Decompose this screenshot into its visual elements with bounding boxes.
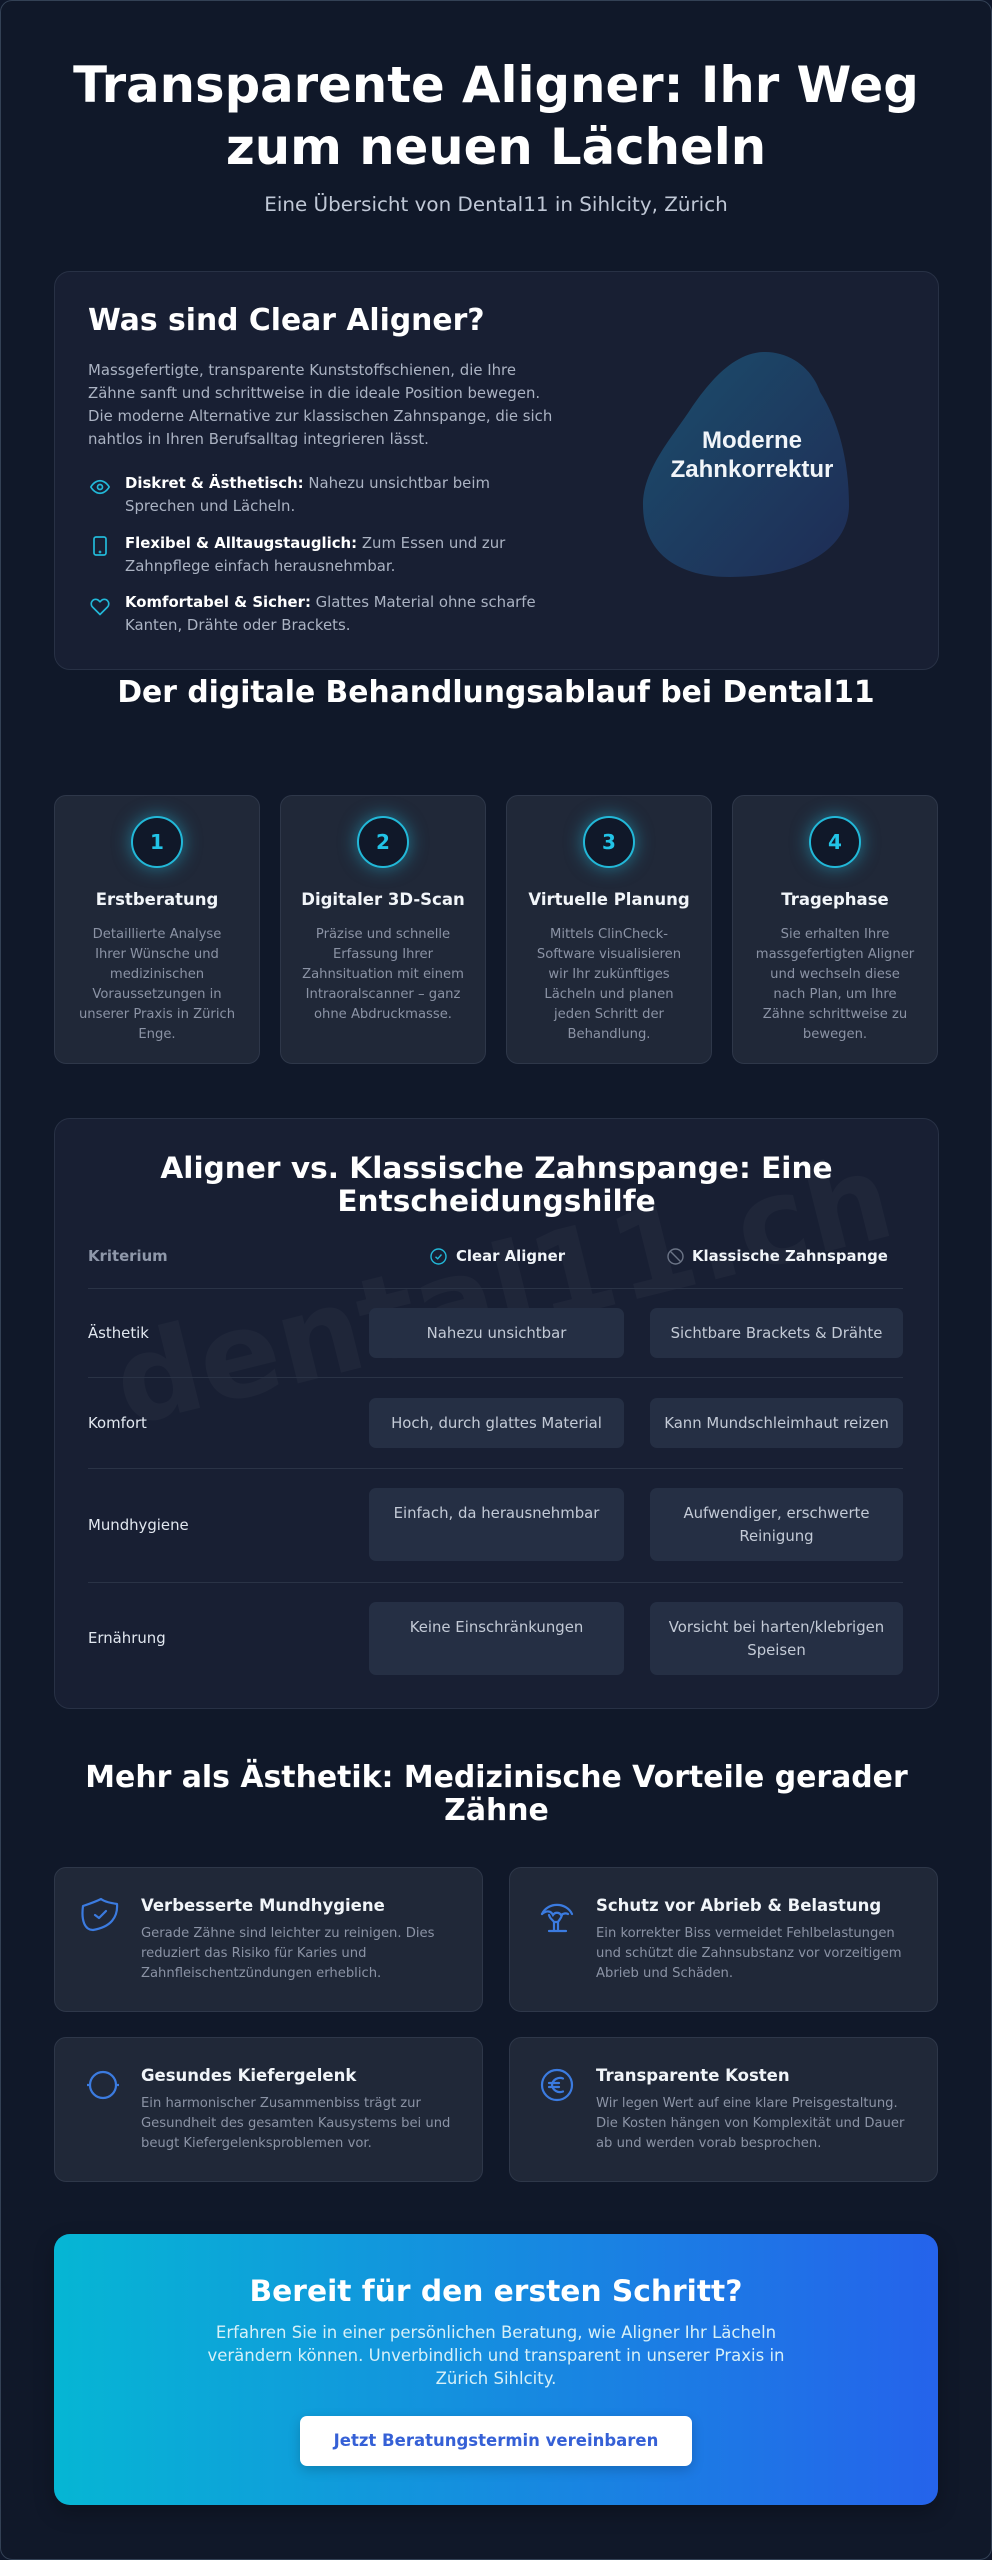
step 1	[54, 795, 260, 1064]
comparison heading: Entscheidungshilfe	[337, 1184, 656, 1218]
cell: aligner ernaehrung: Keine Einschränkungen	[410, 1618, 583, 1636]
row label: komfort: Komfort	[88, 1414, 147, 1432]
cell: klassisch mundhygiene: Reinigung	[739, 1527, 814, 1545]
step description: massgefertigten Aligner	[756, 947, 914, 962]
table header: clear aligner: Clear Aligner	[456, 1247, 565, 1265]
cell: klassisch ernaehrung	[650, 1602, 903, 1675]
cell: aligner komfort: Hoch, durch glattes Material	[391, 1414, 602, 1432]
step description: Intraoralscanner – ganz	[306, 987, 460, 1002]
benefit description: Zahnfleischentzündungen erheblich.	[141, 1966, 381, 1981]
step description: Zahnsituation mit einem	[302, 967, 464, 982]
intro paragraph	[88, 361, 552, 448]
benefit title: Verbesserte Mundhygiene	[141, 1896, 385, 1915]
table header: criterion: Kriterium	[88, 1247, 168, 1265]
panel: comparison	[54, 1118, 939, 1709]
feature text: Flexibel & Alltaugstauglich: Zum Essen und zur	[125, 534, 505, 552]
feature text	[125, 534, 506, 575]
comparison heading: Aligner vs. Klassische Zahnspange: Eine	[160, 1151, 833, 1185]
step description: unserer Praxis in Zürich	[79, 1007, 235, 1022]
subtitle: Eine Übersicht von Dental11 in Sihlcity, Zürich	[264, 193, 728, 216]
title: zum neuen Lächeln	[226, 118, 766, 176]
feature: komfortabel	[90, 593, 536, 634]
step description: Sie erhalten Ihre	[781, 927, 889, 942]
comparison heading	[160, 1151, 833, 1218]
step number	[809, 816, 861, 868]
benefit description	[141, 1926, 434, 1981]
benefit description: und schützt die Zahnsubstanz vor vorzeitigem	[596, 1946, 902, 1961]
benefit description: Die Kosten hängen von Komplexität und Dauer	[596, 2116, 904, 2131]
feature: flexibel	[93, 534, 506, 575]
section heading: benefits	[85, 1758, 908, 1828]
cell: aligner ernaehrung	[369, 1602, 624, 1675]
cell: aligner komfort	[369, 1398, 624, 1448]
step description: ohne Abdruckmasse.	[314, 1007, 452, 1022]
cell: klassisch mundhygiene	[650, 1488, 903, 1561]
cell: klassisch ernaehrung: Vorsicht bei harten/klebrigen	[669, 1618, 884, 1636]
blob label: Moderne	[702, 427, 802, 454]
benefit: mundhygiene	[54, 1867, 483, 2012]
step description: wir Ihr zukünftiges	[548, 967, 670, 982]
step description	[537, 927, 681, 1042]
benefit description: reduziert das Risiko für Karies und	[141, 1946, 366, 1961]
step description: Präzise und schnelle	[316, 927, 450, 942]
step description: bewegen.	[803, 1027, 867, 1042]
step number: 3	[602, 830, 616, 854]
step description: medizinischen	[110, 967, 204, 982]
benefit title: Gesundes Kiefergelenk	[141, 2066, 356, 2085]
step number: 1	[150, 830, 164, 854]
benefit: kosten	[509, 2037, 938, 2182]
cta text: verändern können. Unverbindlich und transparent in unserer Praxis in	[207, 2346, 785, 2365]
row label: ernaehrung: Ernährung	[88, 1629, 166, 1647]
step 3	[506, 795, 712, 1064]
watermark: dental11.ch	[101, 1128, 905, 1454]
intro paragraph: nahtlos in Ihren Berufsalltag integrieren lässt.	[88, 430, 429, 448]
step number	[131, 816, 183, 868]
step title: Tragephase	[781, 890, 889, 909]
icon: joint circle	[87, 2070, 119, 2100]
icon: eye	[90, 480, 110, 494]
icon: heart	[90, 598, 110, 616]
cta heading: Bereit für den ersten Schritt?	[250, 2274, 742, 2309]
benefit: kiefergelenk	[54, 2037, 483, 2182]
benefit description	[596, 2096, 904, 2151]
step 4	[732, 795, 938, 1064]
intro paragraph: Zähne sanft und schrittweise in die ideale Position bewegen.	[88, 384, 540, 402]
icon: shield	[81, 1898, 118, 1932]
intro paragraph: Die moderne Alternative zur klassischen Zahnspange, die sich	[88, 407, 552, 425]
benefit description: Abrieb und Schäden.	[596, 1966, 733, 1981]
benefit title: Transparente Kosten	[596, 2066, 790, 2085]
cell: aligner aesthetik	[369, 1308, 624, 1358]
blob label: Zahnkorrektur	[671, 456, 833, 483]
panel: call to action	[54, 2234, 938, 2505]
cell: klassisch ernaehrung: Speisen	[747, 1641, 806, 1659]
step title: Virtuelle Planung	[528, 890, 690, 909]
cell: klassisch mundhygiene: Aufwendiger, erschwerte	[683, 1504, 870, 1522]
benefit description: ab und werden vorab besprochen.	[596, 2136, 821, 2151]
icon: phone	[93, 536, 107, 556]
panel: what are clear aligners	[54, 271, 939, 670]
step description: Voraussetzungen in	[92, 987, 222, 1002]
cell: klassisch aesthetik: Sichtbare Brackets & Drähte	[671, 1324, 882, 1342]
cell: klassisch aesthetik	[650, 1308, 903, 1358]
blob label	[671, 427, 833, 483]
step description: Lächeln und planen	[544, 987, 674, 1002]
step description: Detaillierte Analyse	[93, 927, 221, 942]
feature: diskret	[90, 474, 490, 515]
cell: klassisch komfort	[650, 1398, 903, 1448]
icon: euro	[540, 2068, 574, 2102]
cta text: Erfahren Sie in einer persönlichen Beratung, wie Aligner Ihr Lächeln	[216, 2323, 776, 2342]
feature text: Sprechen und Lächeln.	[125, 497, 295, 515]
benefit description: Ein korrekter Biss vermeidet Fehlbelastungen	[596, 1926, 895, 1941]
step 2	[280, 795, 486, 1064]
cell: aligner aesthetik: Nahezu unsichtbar	[427, 1324, 566, 1342]
feature text: Kanten, Drähte oder Brackets.	[125, 616, 350, 634]
benefit description: beugt Kiefergelenksproblemen vor.	[141, 2136, 372, 2151]
benefit description: Wir legen Wert auf eine klare Preisgestaltung.	[596, 2096, 898, 2111]
benefit description: Ein harmonischer Zusammenbiss trägt zur	[141, 2096, 421, 2111]
feature text: Diskret & Ästhetisch: Nahezu unsichtbar beim	[125, 474, 490, 492]
step number: 4	[828, 830, 842, 854]
step description	[79, 927, 235, 1042]
benefit description	[596, 1926, 902, 1981]
intro paragraph: Massgefertigte, transparente Kunststoffschienen, die Ihre	[88, 361, 516, 379]
cta button	[300, 2416, 692, 2466]
icon: check circle	[430, 1248, 447, 1265]
step title: Erstberatung	[96, 890, 218, 909]
table header: klassische zahnspange: Klassische Zahnspange	[692, 1247, 888, 1265]
step description: Enge.	[138, 1027, 176, 1042]
step description: nach Plan, um Ihre	[773, 987, 897, 1002]
feature text	[125, 474, 490, 515]
section heading: benefits: Zähne	[444, 1793, 549, 1828]
step number	[583, 816, 635, 868]
benefit description	[141, 2096, 450, 2151]
benefit title: Schutz vor Abrieb & Belastung	[596, 1896, 881, 1915]
title	[73, 56, 919, 176]
step description: und wechseln diese	[770, 967, 900, 982]
title: Transparente Aligner: Ihr Weg	[73, 56, 919, 114]
section heading: process: Der digitale Behandlungsablauf bei Dental11	[117, 675, 875, 710]
step number	[357, 816, 409, 868]
icon: ban circle	[667, 1248, 684, 1265]
step description: Erfassung Ihrer	[333, 947, 433, 962]
step description: jeden Schritt der	[554, 1007, 664, 1022]
cell: klassisch komfort: Kann Mundschleimhaut reizen	[664, 1414, 889, 1432]
graphic: blob	[643, 352, 849, 577]
feature text: Zahnpflege einfach herausnehmbar.	[125, 557, 395, 575]
benefit: schutz	[509, 1867, 938, 2012]
step description	[302, 927, 464, 1022]
section heading: benefits: Mehr als Ästhetik: Medizinische Vorteile gerader	[85, 1760, 908, 1795]
step number: 2	[376, 830, 390, 854]
icon: tooth under arc	[540, 1904, 574, 1932]
row label: mundhygiene: Mundhygiene	[88, 1516, 189, 1534]
feature text	[125, 593, 536, 634]
step description: Mittels ClinCheck-	[550, 927, 668, 942]
benefit description: Gerade Zähne sind leichter zu reinigen. Dies	[141, 1926, 434, 1941]
cta text: Zürich Sihlcity.	[436, 2369, 556, 2388]
cta button: Jetzt Beratungstermin vereinbaren	[334, 2431, 658, 2450]
row label: aesthetik: Ästhetik	[88, 1324, 149, 1342]
cell: aligner mundhygiene: Einfach, da herausnehmbar	[394, 1504, 599, 1522]
step description: Zähne schrittweise zu	[763, 1007, 907, 1022]
step description: Ihrer Wünsche und	[95, 947, 219, 962]
step description: Behandlung.	[568, 1027, 650, 1042]
cta text	[207, 2323, 785, 2388]
heading: was sind clear aligner: Was sind Clear Aligner?	[88, 303, 485, 338]
feature text: Komfortabel & Sicher: Glattes Material ohne scharfe	[125, 593, 536, 611]
step description: Software visualisieren	[537, 947, 681, 962]
cell: aligner mundhygiene	[369, 1488, 624, 1561]
step title: Digitaler 3D-Scan	[301, 890, 465, 909]
step description	[756, 927, 914, 1042]
benefit description: Gesundheit des gesamten Kausystems bei und	[141, 2116, 450, 2131]
